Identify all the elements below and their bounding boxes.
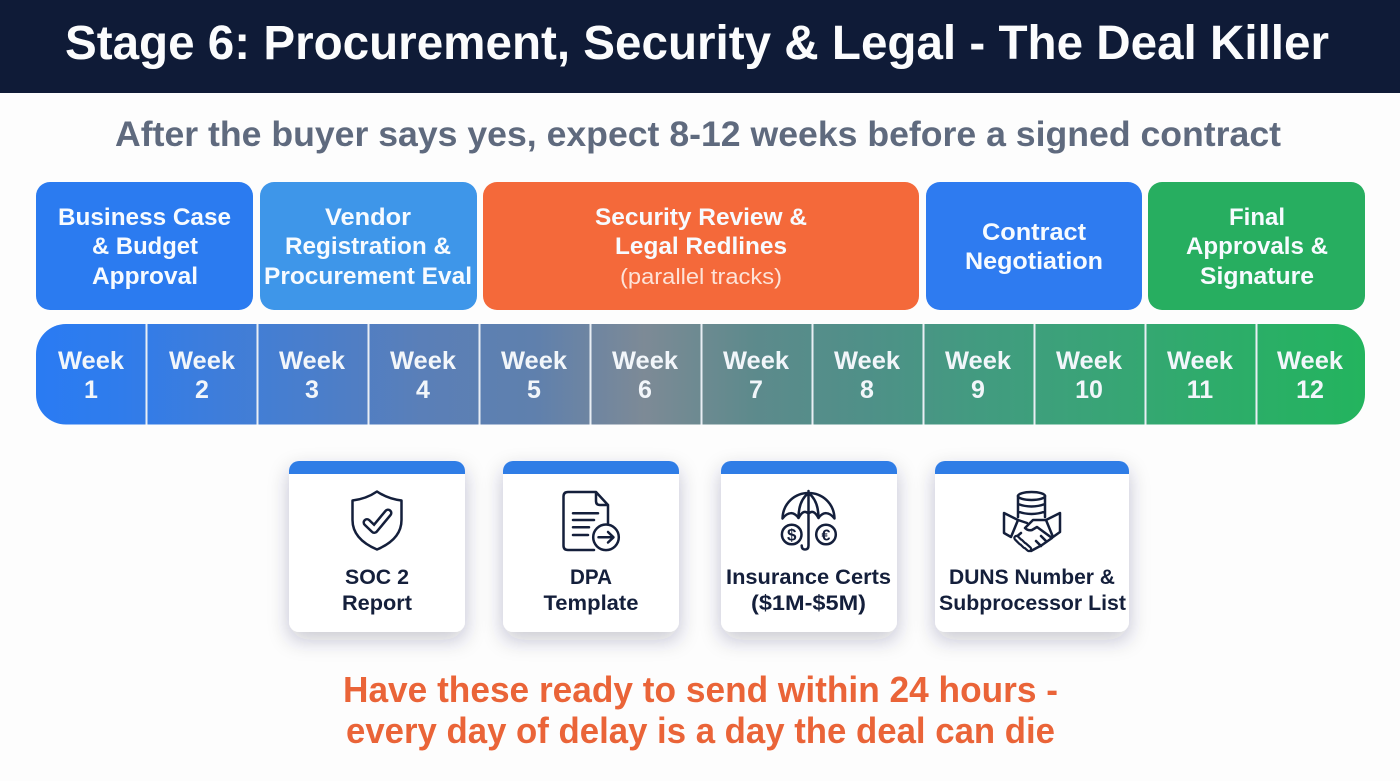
week timeline bar: Week bbox=[169, 347, 235, 375]
week timeline bar: Week bbox=[501, 347, 567, 375]
week timeline bar: 6 bbox=[638, 376, 652, 404]
phase: business case bbox=[36, 182, 253, 310]
card: insurance certs bbox=[721, 461, 897, 632]
card: insurance certs: Insurance Certs bbox=[726, 566, 891, 589]
card: DPA template bbox=[503, 461, 679, 632]
week timeline bar: Week bbox=[1167, 347, 1233, 375]
phase: security and legal bbox=[483, 182, 919, 310]
week timeline bar: Week bbox=[279, 347, 345, 375]
card: DUNS number and subprocessor list: Subprocessor List bbox=[939, 592, 1126, 615]
card: DUNS number and subprocessor list: DUNS Number & bbox=[949, 566, 1115, 589]
phase: final approvals: Approvals & bbox=[1186, 233, 1328, 260]
week timeline bar: 9 bbox=[971, 376, 985, 404]
week timeline bar: Week bbox=[945, 347, 1011, 375]
card: DUNS number and subprocessor list bbox=[935, 461, 1129, 632]
subtitle: After the buyer says yes, expect 8-12 weeks before a signed contract bbox=[115, 115, 1281, 154]
week timeline bar: Week bbox=[612, 347, 678, 375]
week timeline bar: 8 bbox=[860, 376, 874, 404]
phase: final approvals: Final bbox=[1229, 204, 1285, 231]
phase: security and legal: Security Review & bbox=[595, 204, 807, 231]
week timeline bar: 5 bbox=[527, 376, 541, 404]
phase: vendor registration: Registration & bbox=[285, 233, 451, 260]
week timeline bar: 12 bbox=[1296, 376, 1324, 404]
icon: umbrella with coins: € bbox=[822, 528, 831, 544]
week timeline bar: Week bbox=[390, 347, 456, 375]
week timeline bar: Week bbox=[58, 347, 124, 375]
phase: security and legal: (parallel tracks) bbox=[620, 264, 782, 289]
header band with title bbox=[0, 0, 1400, 93]
week timeline bar: 11 bbox=[1187, 376, 1213, 404]
phase: final approvals: Signature bbox=[1200, 263, 1314, 290]
week timeline bar: Week bbox=[834, 347, 900, 375]
week timeline bar: 3 bbox=[305, 376, 319, 404]
phase: business case: & Budget bbox=[92, 233, 198, 260]
week timeline bar: Week bbox=[1277, 347, 1343, 375]
card: SOC 2 report bbox=[289, 461, 465, 632]
card: SOC 2 report: SOC 2 bbox=[345, 566, 409, 589]
phase: security and legal: Legal Redlines bbox=[615, 233, 787, 260]
week timeline bar bbox=[36, 324, 1365, 424]
phase: final approvals bbox=[1148, 182, 1365, 310]
week timeline bar: 2 bbox=[195, 376, 209, 404]
icon: shield with check bbox=[352, 492, 402, 550]
phase: contract negotiation bbox=[926, 182, 1142, 310]
header band with title: Stage 6: Procurement, Security & Legal - The Deal Killer bbox=[65, 17, 1329, 70]
callout: every day of delay is a day the deal can die bbox=[346, 710, 1055, 751]
week timeline bar: 1 bbox=[84, 376, 98, 404]
phase: vendor registration: Procurement Eval bbox=[264, 263, 472, 290]
card: DPA template: Template bbox=[544, 592, 638, 615]
icon: document with arrow bbox=[564, 492, 619, 550]
phase row bbox=[36, 182, 1365, 310]
phase: business case: Approval bbox=[92, 263, 198, 290]
week timeline bar: Week bbox=[723, 347, 789, 375]
phase: vendor registration bbox=[260, 182, 477, 310]
phase: contract negotiation: Negotiation bbox=[965, 248, 1103, 275]
icon: umbrella with coins bbox=[782, 491, 836, 550]
callout: Have these ready to send within 24 hours - bbox=[343, 669, 1058, 710]
phase: contract negotiation: Contract bbox=[982, 219, 1086, 246]
week timeline bar: 10 bbox=[1075, 376, 1103, 404]
week timeline bar: 4 bbox=[416, 376, 430, 404]
icon: database and handshake bbox=[1004, 492, 1060, 551]
card: DPA template: DPA bbox=[570, 566, 612, 589]
phase: business case: Business Case bbox=[58, 204, 231, 231]
week timeline bar: 7 bbox=[749, 376, 763, 404]
card: SOC 2 report: Report bbox=[342, 592, 412, 615]
week timeline bar: Week bbox=[1056, 347, 1122, 375]
icon: umbrella with coins: $ bbox=[787, 526, 797, 544]
phase: vendor registration: Vendor bbox=[325, 204, 411, 231]
callout bbox=[343, 669, 1058, 751]
card: insurance certs: ($1M-$5M) bbox=[751, 592, 866, 615]
